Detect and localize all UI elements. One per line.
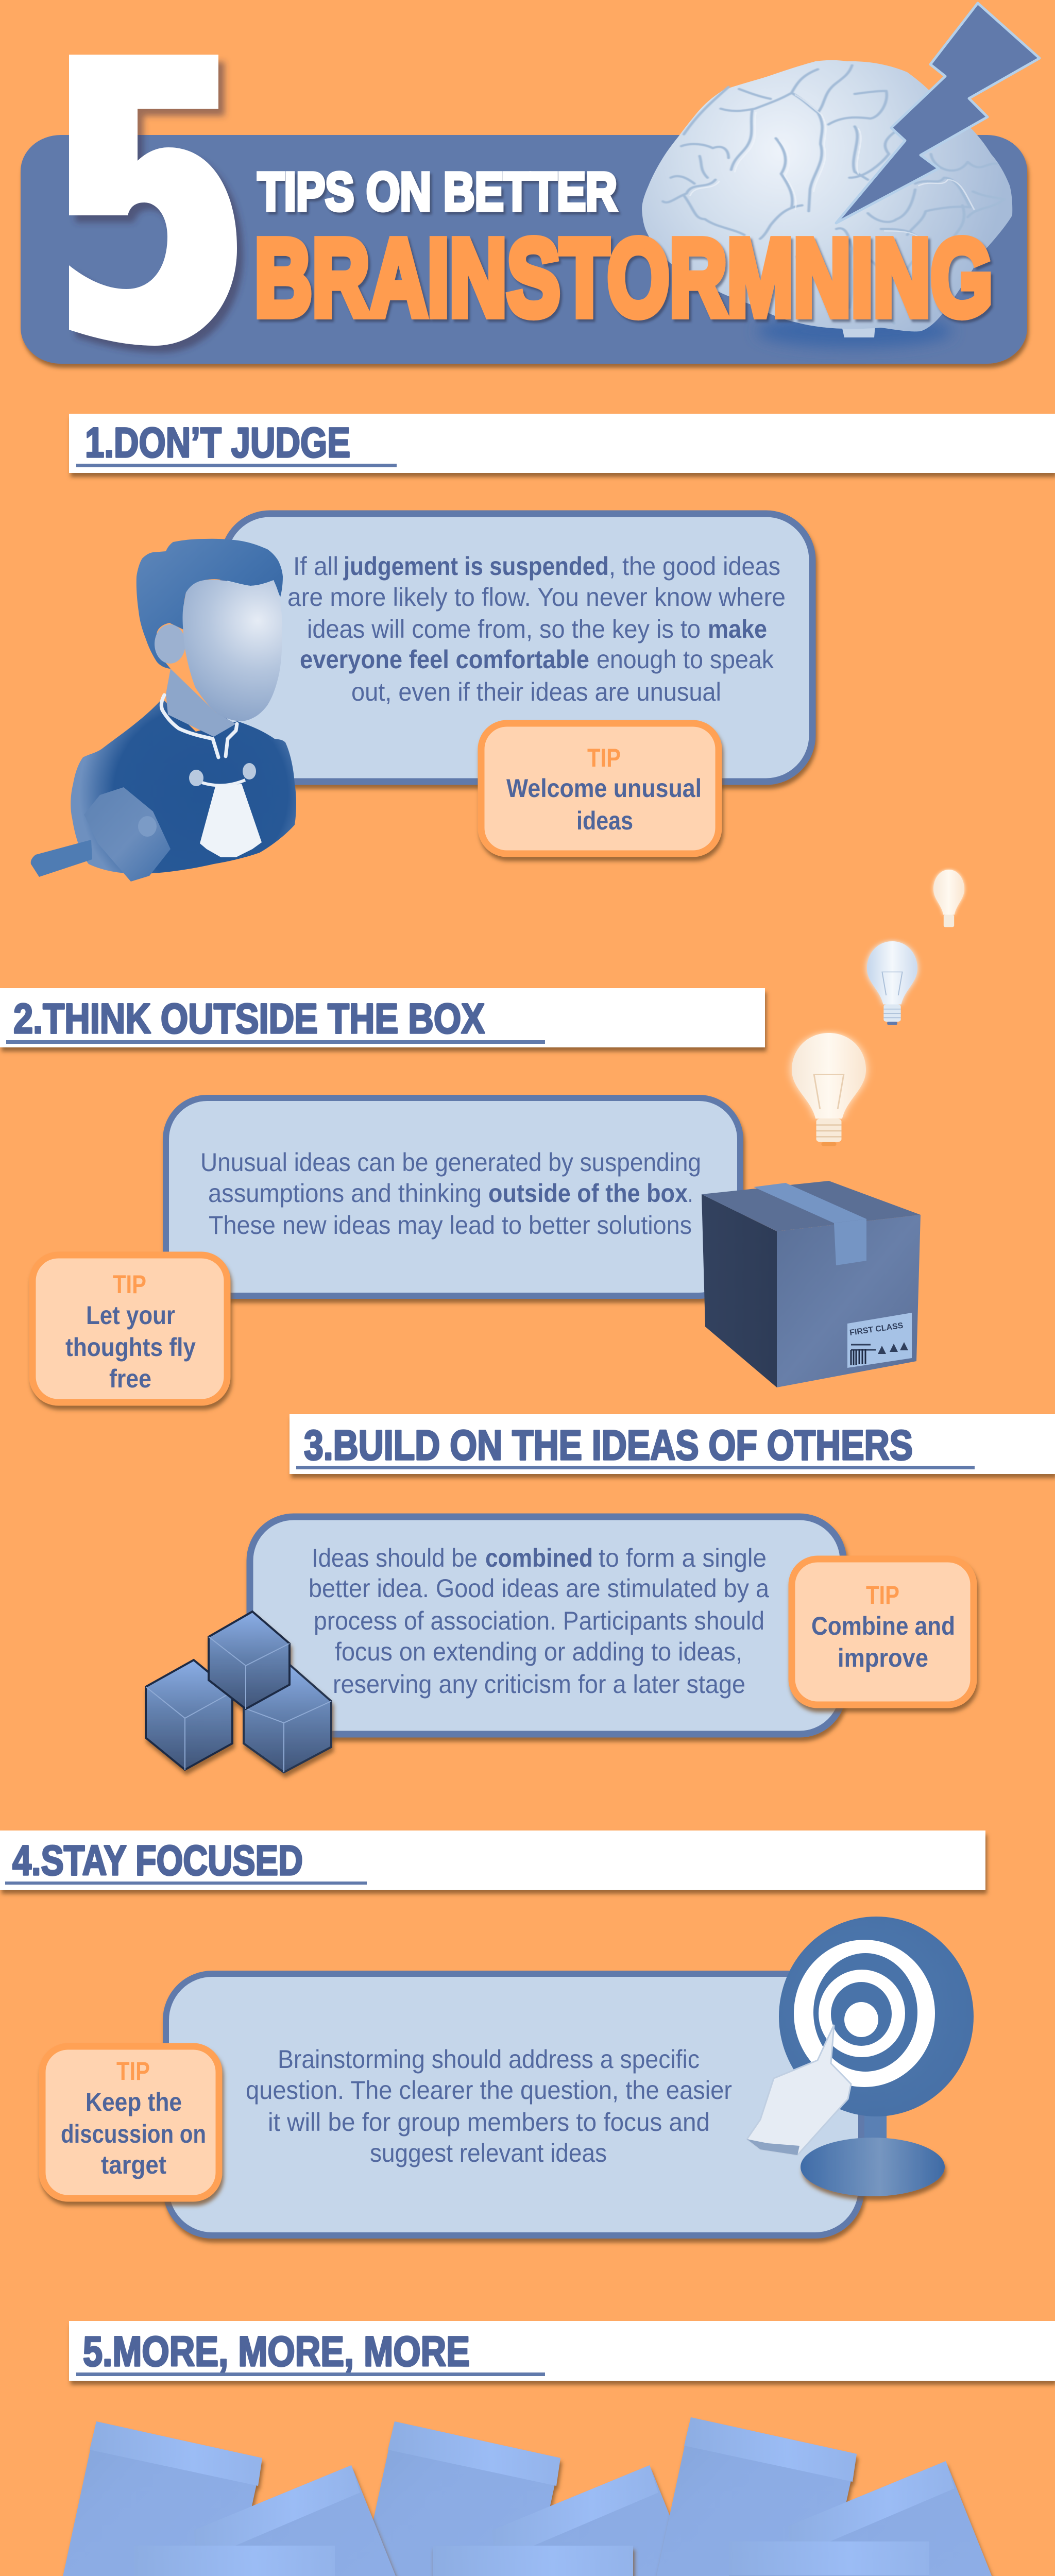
- icon: medium light bulb: [867, 941, 917, 1025]
- text block: stay focused: [246, 2045, 732, 2167]
- text block: build on ideas: [309, 1544, 769, 1699]
- panel: outside the box: [166, 1098, 740, 1296]
- tip: combine and improve: improve: [838, 1643, 928, 1672]
- text block: don't judge: If all: [293, 552, 338, 581]
- icon: cardboard box: FIRST CLASS: [849, 1321, 904, 1337]
- icon: cardboard box: [702, 1181, 921, 1387]
- text block: don't judge: make: [708, 615, 767, 643]
- text block: build on ideas: process of association. Participants should: [314, 1606, 764, 1635]
- text block: stay focused: it will be for group members to focus and: [268, 2108, 710, 2137]
- tip: welcome unusual ideas: ideas: [576, 806, 633, 835]
- tip: welcome unusual ideas: Welcome unusual: [506, 774, 702, 803]
- text block: don't judge: enough to speak: [597, 645, 774, 674]
- text block: build on ideas: better idea. Good ideas are stimulated by a: [309, 1574, 769, 1603]
- text block: don't judge: judgement is suspended: [343, 552, 609, 581]
- lightning bolt: [836, 3, 1040, 223]
- tip: welcome unusual ideas: [481, 723, 719, 854]
- panel: build on ideas: [250, 1517, 843, 1734]
- text block: don't judge: [287, 552, 786, 706]
- icon: judge with gavel: [31, 539, 296, 882]
- sticky notes: left group: [59, 2421, 415, 2576]
- tip: let your thoughts fly free: free: [109, 1364, 151, 1393]
- section 4 heading: [0, 1831, 985, 1890]
- text block: don't judge: ideas will come from, so the key is to: [307, 615, 701, 643]
- tip: keep the discussion on target: discussion on: [61, 2120, 206, 2148]
- text block: outside the box: .: [688, 1179, 693, 1208]
- section 5 heading: 5.MORE, MORE, MORE: [83, 2328, 470, 2375]
- text block: don't judge: , the good ideas: [609, 552, 780, 581]
- tip: let your thoughts fly free: [32, 1255, 227, 1402]
- tip: combine and improve: [792, 1559, 974, 1705]
- text block: stay focused: Brainstorming should address a specific: [278, 2045, 700, 2074]
- tip: let your thoughts fly free: Let your: [86, 1301, 175, 1330]
- text block: outside the box: outside of the box: [488, 1179, 688, 1208]
- tip: let your thoughts fly free: thoughts fly: [65, 1333, 196, 1362]
- tip: combine and improve: Combine and: [811, 1612, 955, 1640]
- icon: small light bulb: [933, 870, 964, 927]
- icon: large light bulb: [792, 1033, 866, 1146]
- tip: combine and improve: TIP: [866, 1581, 899, 1609]
- panel: stay focused: [166, 1974, 861, 2235]
- section 5 heading: [69, 2321, 1055, 2381]
- big number 5: [69, 55, 237, 346]
- tip: let your thoughts fly free: TIP: [113, 1270, 146, 1299]
- text block: build on ideas: reserving any criticism for a later stage: [333, 1670, 745, 1699]
- panel: don't judge: [224, 514, 812, 782]
- text block: outside the box: Unusual ideas can be generated by suspending: [200, 1148, 701, 1177]
- tip: keep the discussion on target: TIP: [116, 2057, 150, 2086]
- text block: build on ideas: focus on extending or adding to ideas,: [335, 1637, 742, 1666]
- text block: outside the box: [200, 1148, 701, 1240]
- tip: keep the discussion on target: target: [101, 2150, 166, 2179]
- section 2 heading: 2.THINK OUTSIDE THE BOX: [13, 995, 485, 1042]
- section 3 heading: 3.BUILD ON THE IDEAS OF OTHERS: [304, 1422, 913, 1469]
- sticky notes: middle group: [357, 2421, 713, 2576]
- tip: keep the discussion on target: Keep the: [86, 2088, 182, 2116]
- section 4 heading: 4.STAY FOCUSED: [12, 1837, 303, 1884]
- text block: stay focused: question. The clearer the question, the easier: [246, 2076, 732, 2105]
- sticky note: centre front: [433, 2546, 633, 2576]
- text block: build on ideas: combined: [485, 1544, 593, 1572]
- icon: cubes: [146, 1612, 331, 1772]
- text block: outside the box: assumptions and thinking: [208, 1179, 482, 1208]
- banner background: [21, 135, 1027, 364]
- text block: don't judge: out, even if their ideas are unusual: [351, 677, 721, 706]
- tip: keep the discussion on target: [42, 2046, 219, 2198]
- sticky notes: right group: [653, 2417, 1010, 2576]
- text block: don't judge: are more likely to flow. You never know where: [287, 583, 786, 612]
- section 1 heading: [69, 414, 1055, 473]
- icon: target with pointing hand: [747, 1917, 974, 2196]
- tip: welcome unusual ideas: TIP: [587, 743, 621, 772]
- text block: don't judge: everyone feel comfortable: [300, 645, 589, 674]
- section 1 heading: 1.DON’T JUDGE: [85, 419, 350, 466]
- text block: build on ideas: to form a single: [599, 1544, 767, 1572]
- section 2 heading: [0, 988, 765, 1047]
- text block: outside the box: These new ideas may lead to better solutions: [209, 1211, 692, 1240]
- brain illustration: [642, 60, 1012, 348]
- text block: stay focused: suggest relevant ideas: [370, 2139, 607, 2167]
- title: tips on better: TIPS ON BETTER: [258, 162, 617, 222]
- text block: build on ideas: Ideas should be: [312, 1544, 478, 1572]
